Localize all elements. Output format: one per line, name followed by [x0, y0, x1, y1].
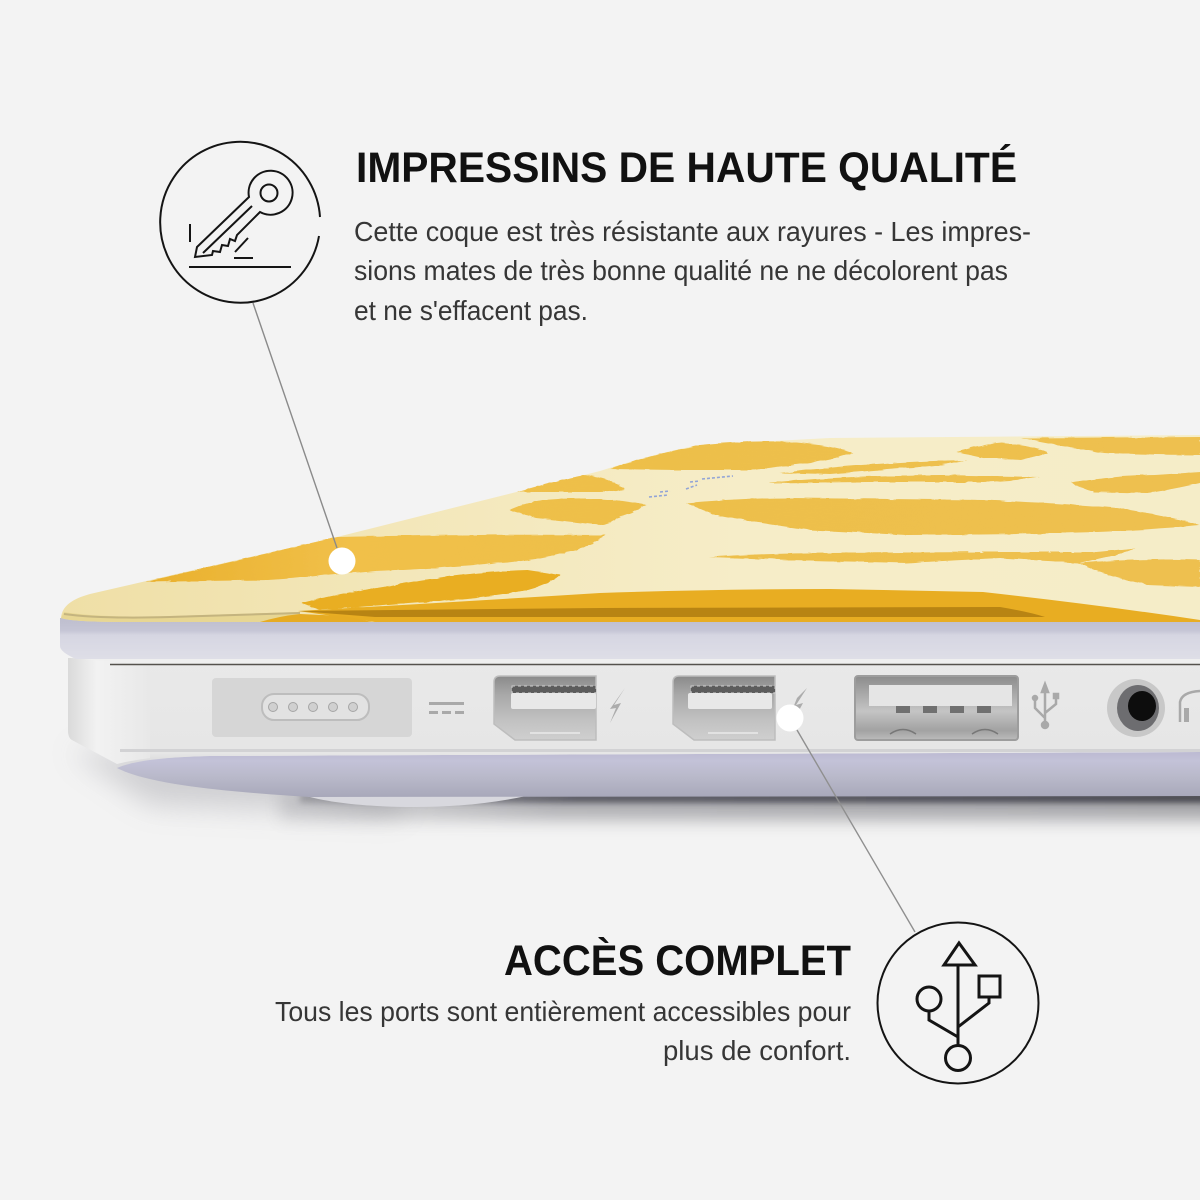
- laptop with yellow painted case: [60, 435, 1200, 820]
- painted yellow brush strokes: [145, 437, 1200, 610]
- text block: full access description: plus de confort.: [663, 1035, 851, 1066]
- lower case shell: [117, 752, 1200, 797]
- rubber foot: [306, 796, 526, 807]
- Thunderbolt port 1: [494, 676, 596, 740]
- lightning icon 2: [793, 688, 807, 716]
- DC power symbol: [429, 702, 464, 714]
- lid cover: [61, 435, 1200, 622]
- USB symbol: [1033, 684, 1058, 728]
- text block: print quality description: et ne s'effacent pas.: [354, 295, 588, 326]
- icon: USB in circle: [878, 922, 1038, 1084]
- MagSafe port: [212, 678, 412, 737]
- large stroke along the lid edge: [260, 589, 1200, 622]
- text block: print quality description: Cette coque est très résistante aux rayures - Les impres-: [354, 216, 1031, 247]
- silver laptop body: [68, 658, 1200, 764]
- USB port: [855, 676, 1018, 740]
- marker dot: lid: [328, 548, 356, 574]
- icon: key in circle: [160, 142, 320, 303]
- heading: full access: ACCÈS COMPLET: [504, 937, 851, 985]
- magnetic connector: [262, 694, 369, 720]
- lightning icon 1: [610, 688, 625, 723]
- text block: full access description: [275, 996, 851, 1066]
- text block: print quality description: [354, 216, 1031, 326]
- connector line: print quality callout: [253, 303, 337, 548]
- faint logo on the lid: [649, 476, 733, 497]
- headphone symbol: [1180, 691, 1200, 722]
- heading: print quality: IMPRESSINS DE HAUTE QUALITÉ: [356, 144, 1017, 192]
- cast shadow: [70, 750, 1200, 820]
- marker dot: ports: [776, 704, 804, 732]
- connector line: port access callout: [797, 730, 915, 932]
- text block: full access description: Tous les ports sont entièrement accessibles pour: [275, 996, 851, 1027]
- audio jack: [1107, 679, 1165, 737]
- Thunderbolt port 2: [673, 676, 775, 740]
- translucent case band: [60, 618, 1200, 659]
- text block: print quality description: sions mates de très bonne qualité ne ne décolorent pas: [354, 255, 1008, 286]
